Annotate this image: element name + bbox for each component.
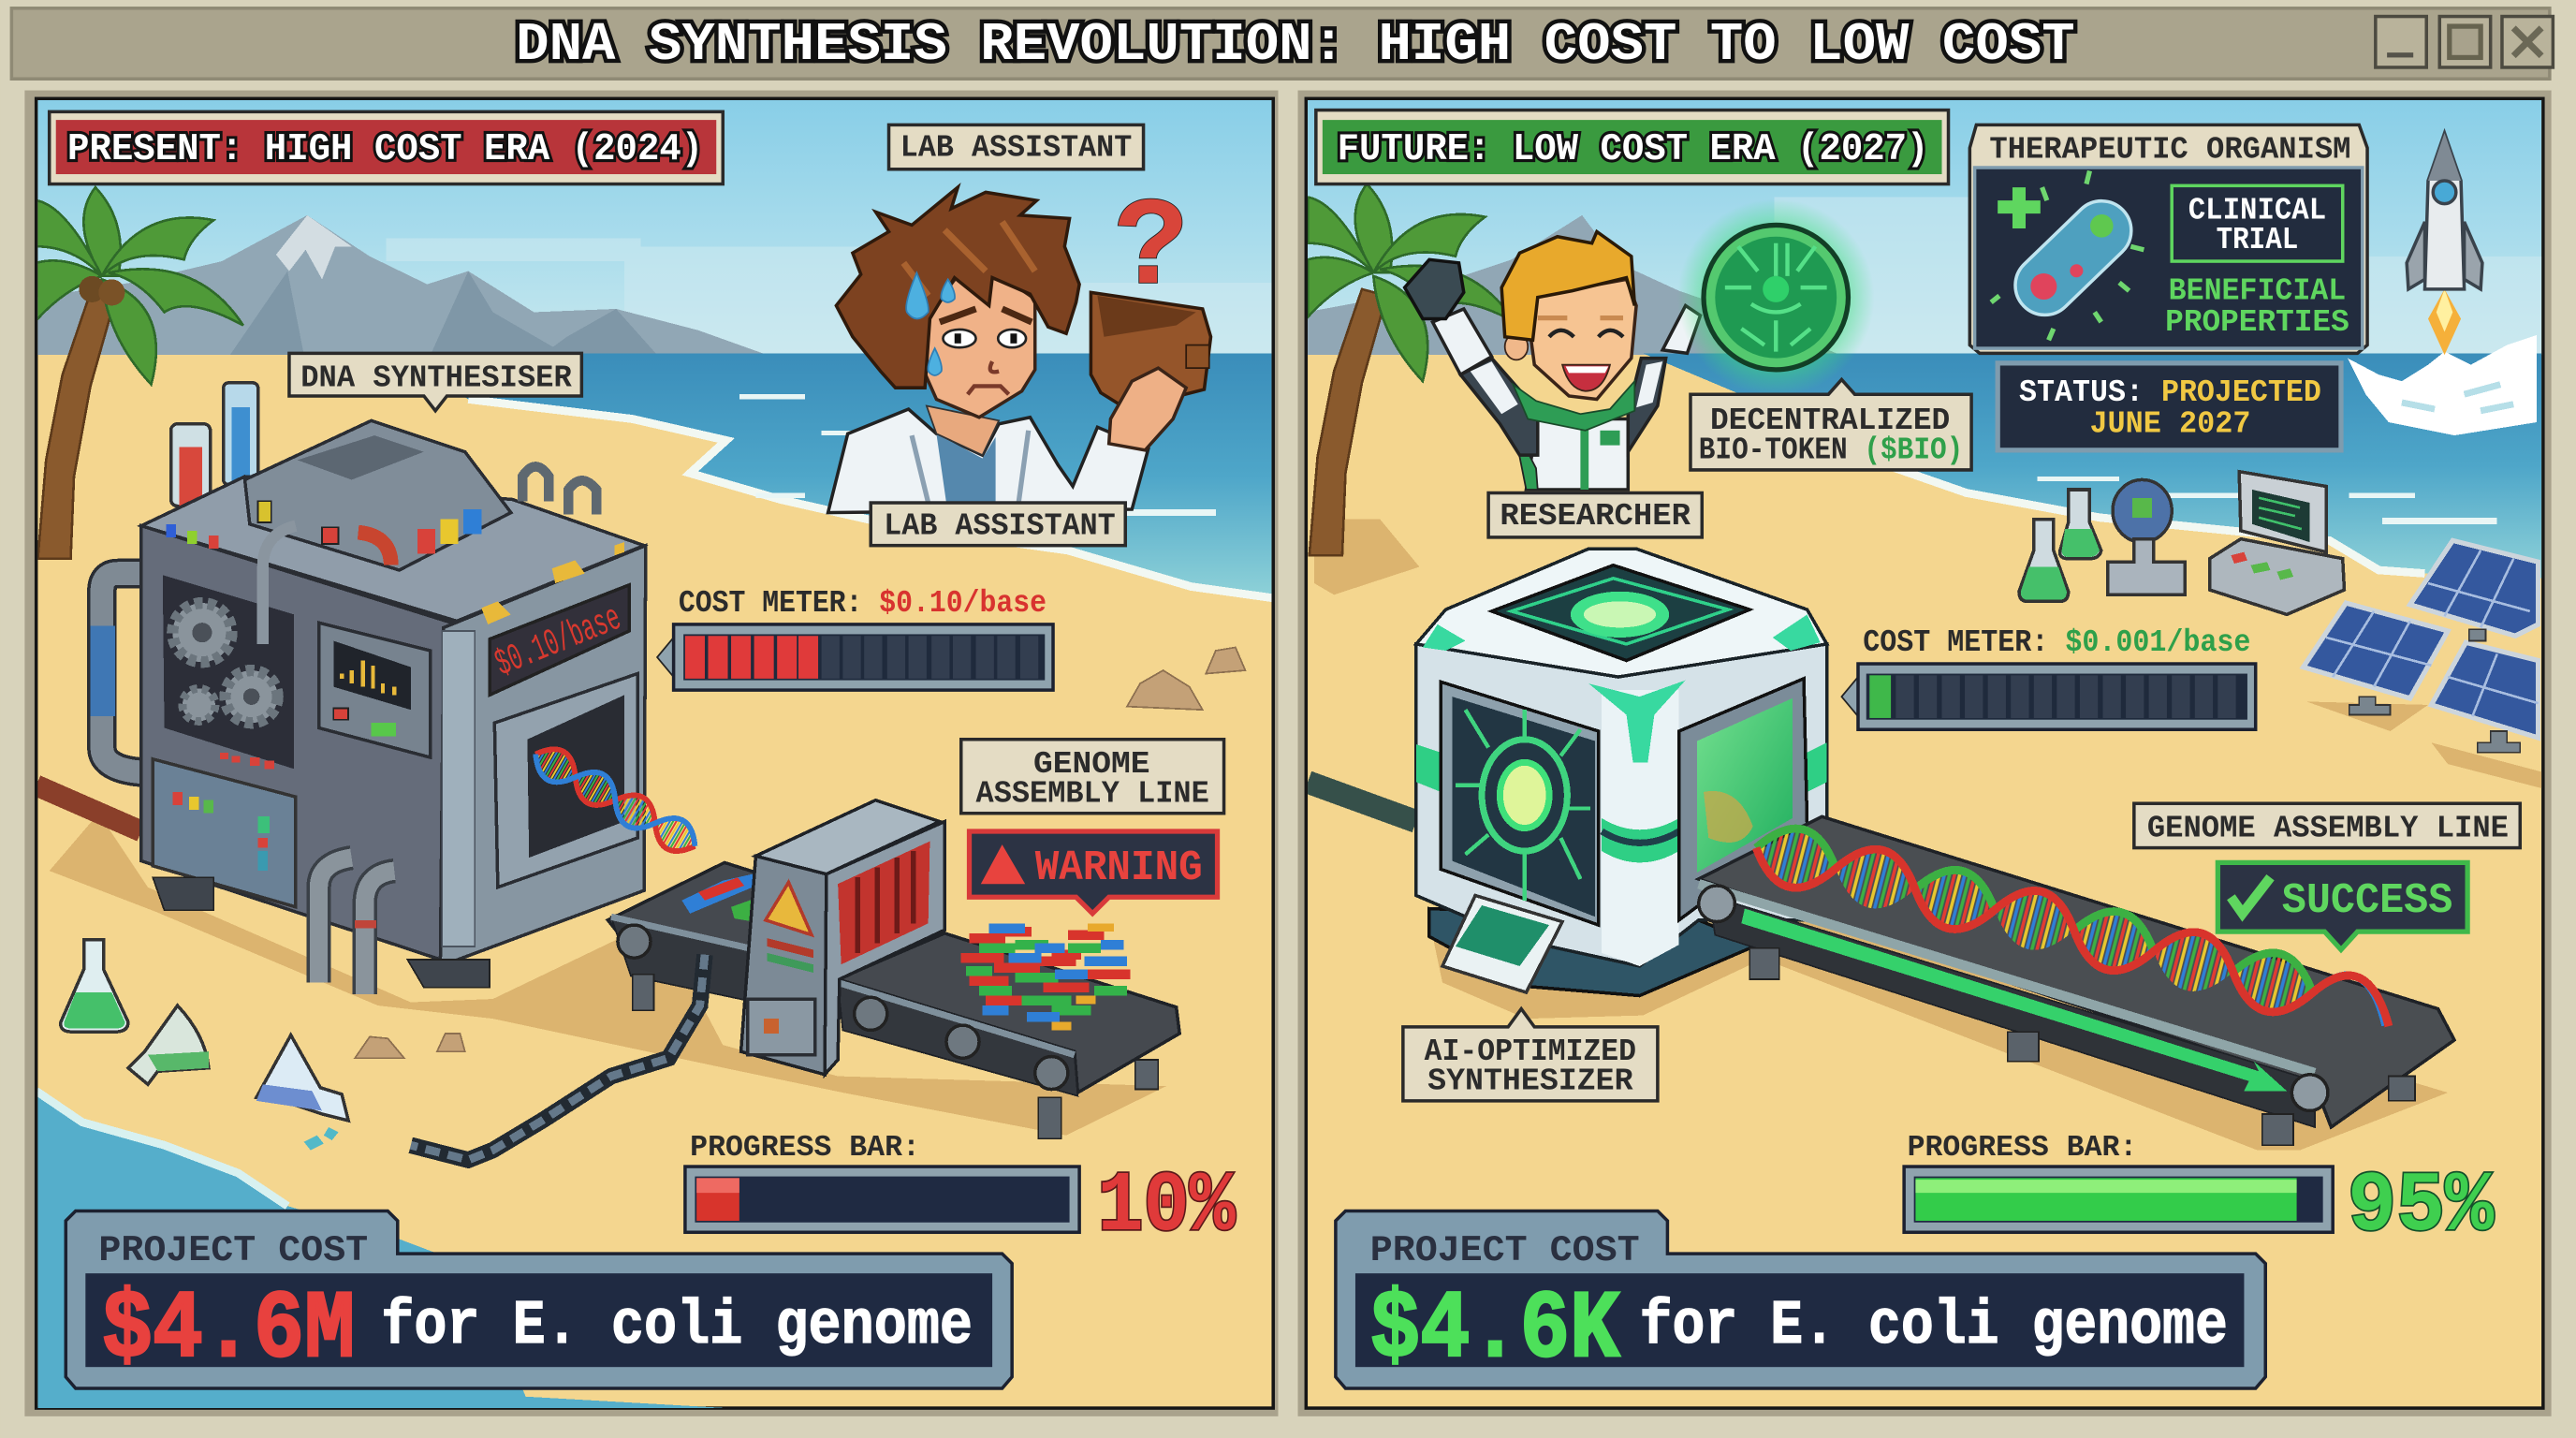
left section bbox=[605, 861, 753, 944]
progress bar: future bbox=[1904, 1132, 2494, 1255]
label: AI optimized synthesizer bbox=[1403, 1009, 1658, 1101]
beach scene: present bbox=[37, 98, 1273, 1410]
face bbox=[923, 271, 1035, 418]
icon: warning triangle bbox=[766, 882, 812, 935]
side bands bbox=[1416, 742, 1827, 862]
icon: plus bbox=[1998, 187, 2041, 228]
hand bbox=[1109, 368, 1186, 450]
synthesis chamber bbox=[494, 674, 637, 888]
DNA synthesiser machine bbox=[141, 420, 646, 994]
suit bbox=[1526, 419, 1628, 490]
sea bbox=[466, 354, 1271, 594]
label: present header: PRESENT: HIGH COST ERA (2024) bbox=[67, 128, 703, 171]
progress bar: present: PROGRESS BAR: bbox=[690, 1132, 920, 1165]
DNA fragment pile bbox=[961, 923, 1131, 1030]
label: genome assembly line present: GENOME bbox=[1033, 747, 1150, 783]
label: decentralized bio-token: DECENTRALIZED bbox=[1710, 404, 1950, 439]
front corner strip bbox=[442, 631, 475, 946]
sand shadows bbox=[1314, 520, 2543, 1151]
label: decentralized bio-token bbox=[1690, 379, 1971, 470]
project cost: future: $4.6K bbox=[1370, 1276, 1620, 1385]
sweat drops bbox=[906, 272, 955, 375]
icon: palm tree bbox=[1308, 184, 1515, 555]
conveyor belt: future bbox=[1699, 816, 2454, 1145]
mountains bbox=[37, 215, 768, 355]
face bbox=[1531, 279, 1636, 399]
icon: solar panels bbox=[2304, 540, 2539, 753]
cost meter: present: COST METER: $0.10/base bbox=[679, 586, 1046, 622]
bottom left sea bbox=[37, 1091, 755, 1410]
project cost: present bbox=[66, 1211, 1012, 1388]
label: decentralized bio-token: BIO-TOKEN ($BIO) bbox=[1699, 433, 1963, 469]
icon: drain pipes bbox=[319, 858, 394, 994]
label: AI optimized synthesizer: AI-OPTIMIZED bbox=[1425, 1034, 1636, 1070]
machine feet bbox=[153, 877, 490, 988]
progress bar: future: PROGRESS BAR: bbox=[1908, 1132, 2137, 1165]
AI optimized synthesizer bbox=[1416, 549, 1827, 996]
project cost: future: PROJECT COST bbox=[1370, 1230, 1640, 1271]
bio-token coin bbox=[1677, 198, 1875, 396]
panel: therapeutic organism bbox=[1969, 125, 2367, 353]
label: DNA synthesiser bbox=[289, 353, 581, 411]
warning callout: WARNING bbox=[1035, 844, 1203, 892]
panel: therapeutic organism: THERAPEUTIC ORGANISM bbox=[1989, 132, 2351, 168]
LED display bbox=[490, 585, 629, 695]
chain bbox=[411, 955, 705, 1160]
green portal bbox=[1679, 679, 1808, 920]
lab coat bbox=[828, 409, 1149, 513]
label: researcher: RESEARCHER bbox=[1500, 499, 1690, 535]
hair bbox=[836, 187, 1079, 388]
icon: microbe bbox=[2003, 189, 2144, 327]
panel: present high cost era bbox=[24, 91, 1278, 1416]
project cost: future bbox=[1336, 1211, 2265, 1388]
icon: DNA strand leaving machine bbox=[534, 747, 698, 854]
project cost: present: for E. coli genome bbox=[381, 1291, 973, 1362]
icon: red brown pipe bbox=[37, 785, 141, 831]
panel: future low cost era bbox=[1298, 91, 2552, 1416]
LED display: $0.10/base bbox=[490, 597, 627, 686]
label: genome assembly line future: GENOME ASSEMBLY LINE bbox=[2147, 811, 2509, 846]
cost meter: present bbox=[657, 586, 1053, 690]
icon: side pipe bbox=[91, 574, 141, 772]
progress bar: present bbox=[685, 1132, 1236, 1255]
screen bbox=[1441, 682, 1599, 925]
label: future header bbox=[1316, 110, 1949, 184]
mouth bbox=[968, 361, 1009, 394]
title bar bbox=[11, 8, 2553, 79]
label: DNA synthesiser: DNA SYNTHESISER bbox=[300, 360, 572, 396]
icon: coil pipes bbox=[522, 466, 596, 514]
hair bbox=[1501, 231, 1634, 340]
DNA helix on belt bbox=[1749, 819, 2399, 1042]
beneficial properties bbox=[2165, 273, 2349, 341]
beneficial properties: PROPERTIES bbox=[2165, 305, 2349, 341]
cost meter: future: COST METER: $0.001/base bbox=[1863, 625, 2250, 661]
progress bar: present: 10% bbox=[1097, 1159, 1236, 1255]
title: DNA SYNTHESIS REVOLUTION: HIGH COST TO LOW COST bbox=[516, 15, 2075, 76]
label: future header: FUTURE: LOW COST ERA (2027) bbox=[1338, 128, 1928, 171]
icon: lab equipment bbox=[2019, 472, 2344, 614]
collar bbox=[1513, 381, 1634, 431]
icon: warning bbox=[981, 844, 1025, 884]
eyes bbox=[943, 330, 976, 347]
eyes and mouth bbox=[1549, 330, 1623, 337]
project cost: future: for E. coli genome bbox=[1640, 1291, 2228, 1362]
status panel bbox=[1998, 363, 2341, 450]
icon: pipe bbox=[1308, 782, 1416, 822]
gears panel bbox=[163, 575, 294, 769]
sea bbox=[1643, 353, 2543, 579]
label: AI optimized synthesizer: SYNTHESIZER bbox=[1427, 1064, 1633, 1100]
beach scene: future bbox=[1306, 98, 2543, 1151]
label: clinical trial: CLINICAL bbox=[2188, 193, 2326, 228]
label: clinical trial: TRIAL bbox=[2217, 223, 2298, 258]
lower control panel bbox=[153, 759, 296, 907]
icon: rocks bbox=[355, 647, 1245, 1058]
green arrow bbox=[1741, 909, 2287, 1091]
project cost: present: PROJECT COST bbox=[98, 1230, 368, 1271]
icon: bent tube bbox=[263, 526, 296, 644]
icon: palm tree bbox=[37, 187, 243, 559]
icon: wallet bbox=[1090, 292, 1211, 409]
icon: window buttons bbox=[2376, 17, 2553, 67]
label: present header bbox=[50, 111, 723, 184]
conveyor belt: present bbox=[607, 862, 1179, 1138]
label: genome assembly line present: ASSEMBLY LINE bbox=[976, 776, 1209, 812]
icon: sample tubes bbox=[171, 383, 258, 506]
icon: question mark: ? bbox=[1114, 180, 1189, 321]
fist bbox=[1405, 259, 1464, 318]
right section bbox=[838, 933, 1179, 1093]
ear bbox=[1505, 333, 1528, 360]
ear bbox=[889, 329, 918, 368]
warning callout bbox=[970, 831, 1218, 914]
icon: check mark bbox=[2231, 877, 2271, 914]
label: clinical trial bbox=[2172, 185, 2343, 261]
label: lab assistant bottom: LAB ASSISTANT bbox=[884, 508, 1116, 544]
gating scanner bbox=[741, 800, 944, 1075]
sand shadows bbox=[50, 814, 1166, 1136]
status panel: JUNE 2027 bbox=[2089, 407, 2250, 443]
mountains bbox=[1306, 215, 1840, 355]
icon: flasks bbox=[61, 940, 348, 1151]
label: genome assembly line present bbox=[961, 740, 1224, 814]
status panel: STATUS: PROJECTED bbox=[2019, 375, 2321, 411]
icon: DNA ghost inside portal bbox=[1704, 791, 1753, 843]
icon: rocket exhaust cloud bbox=[2348, 335, 2537, 435]
success callout: SUCCESS bbox=[2282, 876, 2452, 925]
icon: rocket bbox=[2407, 133, 2482, 355]
character: researcher bbox=[1405, 231, 1701, 490]
success callout bbox=[2217, 862, 2467, 949]
icon: hazard lights bbox=[481, 542, 624, 624]
monitor bbox=[319, 623, 431, 757]
character: lab assistant bbox=[828, 180, 1211, 513]
keypad bbox=[1442, 895, 1562, 992]
project cost: present: $4.6M bbox=[102, 1276, 355, 1385]
progress bar: future: 95% bbox=[2348, 1159, 2494, 1255]
label: lab assistant top: LAB ASSISTANT bbox=[900, 131, 1132, 167]
top vent box bbox=[166, 420, 511, 570]
beneficial properties: BENEFICIAL bbox=[2169, 273, 2346, 309]
cost meter: future bbox=[1841, 625, 2256, 729]
